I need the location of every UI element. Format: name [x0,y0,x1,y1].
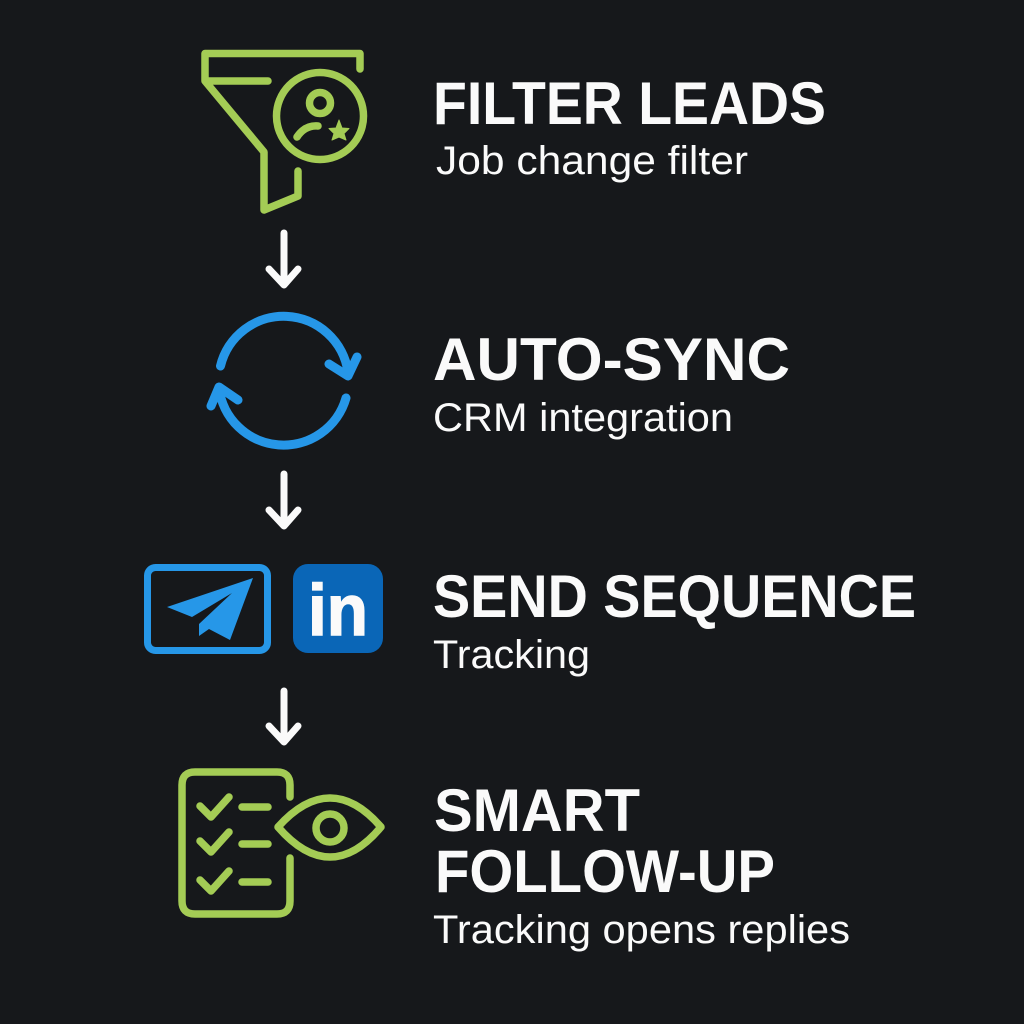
arrow: step 2 to step 3 [269,474,298,526]
subtext: tracking opens replies: Tracking opens replies [433,908,850,952]
icon: checklist with eye [182,772,381,914]
heading: auto-sync: AUTO-SYNC [433,326,790,393]
subtext: tracking: Tracking [433,633,590,677]
subtext: job change filter: Job change filter [436,139,748,183]
arrow: step 1 to step 2 [269,233,298,285]
icon: sync arrows [211,316,357,445]
heading: send sequence: SEND SEQUENCE [433,563,916,630]
icon: funnel with user and star [205,54,364,210]
icon: LinkedIn badge: in [308,571,368,651]
icon: paper plane in rounded frame [148,568,268,650]
subtext: CRM integration: CRM integration [433,396,733,440]
step 2: auto-sync [211,316,790,445]
heading: smart follow-up [434,777,775,905]
heading: smart follow-up: FOLLOW-UP [435,838,775,905]
heading: smart follow-up: SMART [434,777,640,844]
step 3: send sequence [148,563,916,677]
step 4: smart follow-up [182,772,850,952]
step 1: filter leads [205,54,826,210]
icon: LinkedIn badge [293,564,383,653]
arrow: step 3 to step 4 [269,691,298,742]
heading: filter leads: FILTER LEADS [433,70,826,137]
